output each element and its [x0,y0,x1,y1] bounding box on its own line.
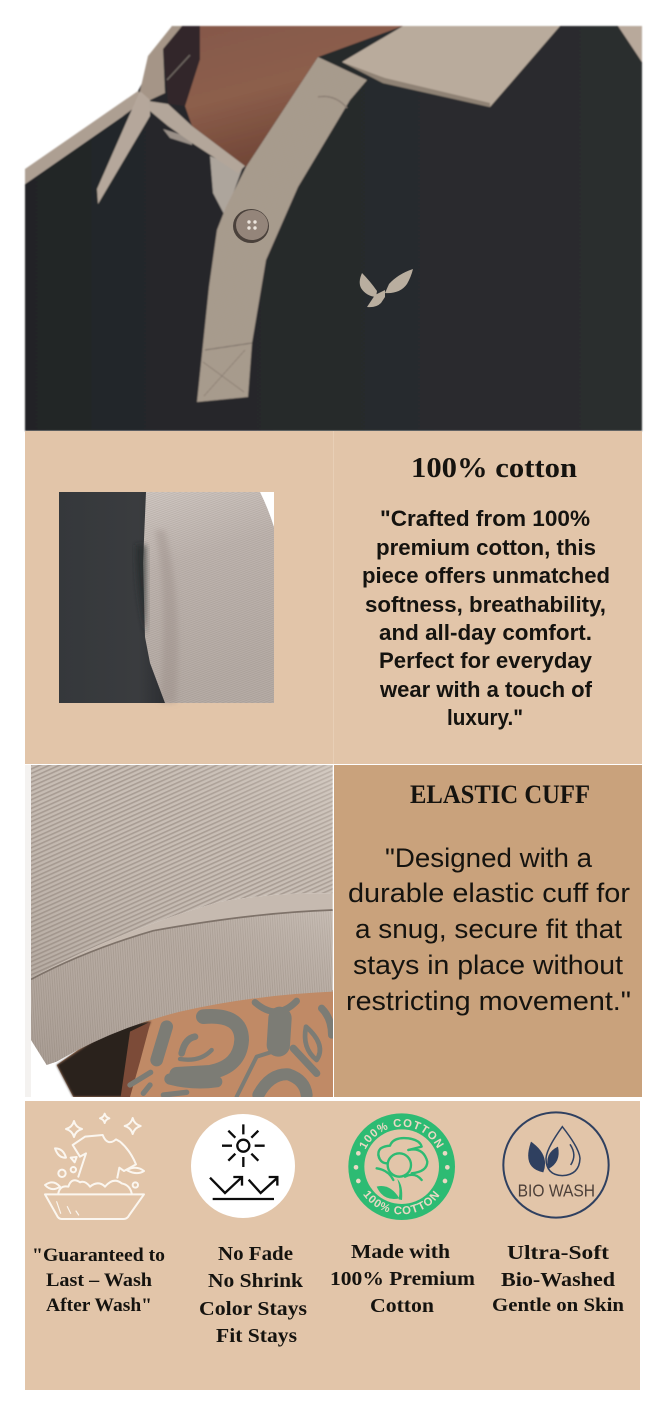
text block: ultra-soft bio-washed: Ultra-Soft [507,1242,609,1264]
text block: guaranteed to last: "Guaranteed to [32,1245,165,1266]
text block: cotton description: "Crafted from 100% [380,506,590,531]
text block: premium cotton [330,1241,475,1317]
text block: cotton description: softness, breathability, [365,592,606,617]
text block: ultra-soft bio-washed [492,1242,624,1316]
icon: washing basin [45,1114,144,1219]
arm with tattoo [57,990,333,1097]
text block: cotton description: Perfect for everyday [379,648,593,673]
icon: 100% cotton badge [348,1113,455,1220]
text block: guaranteed to last: After Wash" [46,1295,152,1316]
text block: premium cotton: 100% Premium [330,1268,475,1290]
text block: cuff description: a snug, secure fit that [355,914,623,944]
text block: cuff description [346,843,631,1016]
text block: cotton description: wear with a touch of [379,677,593,702]
text block: no fade no shrink: Color Stays [199,1298,307,1320]
text block: no fade no shrink: No Fade [218,1243,293,1265]
photo: elastic cuff close-up [25,765,333,1097]
sleeve detail photo [59,492,274,703]
text block: cuff description: durable elastic cuff for [348,878,630,908]
text block: cotton description: luxury." [447,705,523,730]
text block: premium cotton: Made with [351,1241,450,1263]
icon: bio wash badge: BIO WASH [518,1181,595,1201]
text block: cuff description: "Designed with a [385,843,593,873]
panel: elastic cuff [334,765,642,1097]
text block: ultra-soft bio-washed: Gentle on Skin [492,1295,624,1316]
text block: cotton description: premium cotton, this [376,535,596,560]
icon: shirt button [233,209,269,243]
icon: no fade, no shrink [191,1114,295,1218]
icon: 100% cotton badge: 100% COTTON [363,1190,440,1214]
text block: guaranteed to last: Last – Wash [46,1270,152,1291]
icon: 100% cotton badge: 100% COTTON [360,1119,444,1150]
icon: embroidered wing logo [360,269,413,307]
text block: guaranteed to last [32,1245,165,1316]
panel: feature icons [25,1101,640,1390]
text block: no fade no shrink: Fit Stays [216,1325,297,1347]
text block: no fade no shrink: No Shrink [208,1270,304,1292]
heading: elastic cuff: ELASTIC CUFF [410,780,590,809]
text block: no fade no shrink [199,1243,307,1347]
icon: bio wash badge [503,1112,609,1218]
hero photo: polo shirt collar and chest [25,26,642,431]
panel: 100% cotton [25,431,642,764]
text block: cuff description: restricting movement." [346,986,631,1016]
text block: premium cotton: Cotton [370,1295,434,1317]
text block: cotton description: piece offers unmatched [362,563,610,588]
text block: cuff description: stays in place without [353,950,624,980]
text block: ultra-soft bio-washed: Bio-Washed [501,1269,615,1291]
text block: cotton description: and all-day comfort. [379,620,592,645]
sleeve fabric and ribbed cuff [31,765,333,1065]
heading: 100% cotton: 100% cotton [411,453,577,484]
text block: cotton description [362,506,610,730]
